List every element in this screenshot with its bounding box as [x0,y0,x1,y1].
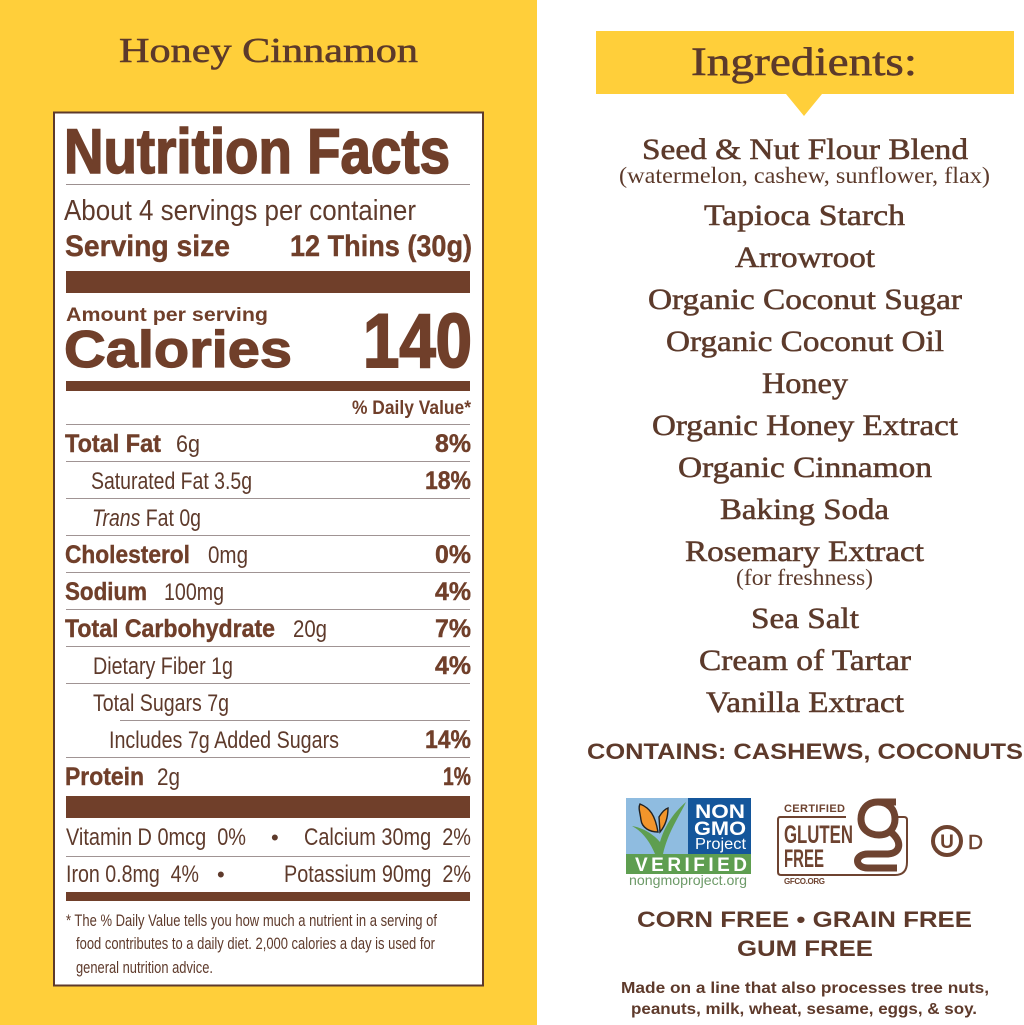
calories block: Calories [64,321,292,379]
nutrient rows: Saturated Fat 3.5g [91,468,252,495]
panel: nutrition facts label [54,112,483,986]
vitamins and minerals [66,796,471,901]
facility allergen note [621,980,989,1018]
ingredients list: Rosemary Extract [685,535,925,568]
icon: non-GMO project verified: GMO [694,819,746,840]
servings block: 12 Thins (30g) [290,230,472,263]
facility allergen note: Made on a line that also processes tree nuts, [621,980,989,997]
footnote: food contributes to a daily diet. 2,000 calories a day is used for [76,934,435,953]
icon: non-GMO project verified [626,798,751,888]
vitamins and minerals: • [271,825,279,850]
ingredients list: Organic Coconut Sugar [648,283,962,316]
daily value header: % Daily Value* [352,398,472,419]
nutrient rows: 20g [293,616,327,643]
nutrient rows [65,424,471,791]
nutrient rows: 2g [157,764,180,791]
nutrient rows: Sodium [65,578,147,606]
nutrient rows: 14% [425,726,471,754]
nutrient rows: Total Carbohydrate [65,615,275,643]
ingredients list: Cream of Tartar [699,644,911,677]
icon: OU-D kosher: U [940,832,954,853]
heading: nutrition facts: Nutrition Facts [64,117,450,187]
ingredients list: Vanilla Extract [706,686,905,719]
icon: OU-D kosher: D [968,832,983,854]
vitamins and minerals: Iron 0.8mg 4% [66,861,199,888]
nutrient rows: 8% [435,430,471,458]
ingredients list: (watermelon, cashew, sunflower, flax) [619,163,990,188]
nutrient rows: Protein [65,763,144,791]
vitamins and minerals: Vitamin D 0mcg 0% [66,824,246,851]
ingredients list: Seed & Nut Flour Blend [642,133,968,166]
calories block: Amount per serving [66,305,268,326]
ingredients list [619,133,990,719]
footnote: general nutrition advice. [76,958,213,977]
vitamins and minerals: • [217,862,225,887]
ingredients list: Organic Coconut Oil [666,325,944,358]
ingredients list: Baking Soda [720,493,889,526]
calories block [64,299,472,391]
icon: certified gluten free [778,802,907,886]
nutrient rows: 0% [435,541,471,569]
free-from claims: GUM FREE [737,936,873,961]
free-from claims [637,907,972,961]
vitamins and minerals: Potassium 90mg 2% [284,861,471,888]
ingredients list: Sea Salt [751,602,860,635]
icon: non-GMO project verified: nongmoproject.org [629,872,747,888]
nutrient rows: 7% [435,615,471,643]
title: flavour name: Honey Cinnamon [119,31,418,70]
nutrient rows: Includes 7g Added Sugars [109,727,339,754]
icon: certified gluten free: CERTIFIED [784,803,845,815]
nutrient rows: 6g [176,431,200,458]
ingredients list: Organic Honey Extract [652,409,959,442]
nutrient rows: Cholesterol [65,541,190,569]
footnote: * The % Daily Value tells you how much a nutrient in a serving of [66,911,437,930]
banner: ingredients heading [596,31,1014,116]
icon: OU-D kosher [933,827,983,855]
ingredients list: Tapioca Starch [704,199,905,232]
icon: non-GMO project verified: NON [695,802,745,823]
ingredients list: Arrowroot [735,241,876,274]
ingredients list: Organic Cinnamon [678,451,932,484]
servings block: Serving size [65,230,230,263]
icon: certified gluten free: FREE [784,845,824,873]
vitamins and minerals: Calcium 30mg 2% [304,824,471,851]
servings block: About 4 servings per container [64,195,416,227]
icon: certified gluten free: GFCO.ORG [784,877,825,886]
nutrient rows: 1% [443,763,471,791]
nutrient rows: Dietary Fiber 1g [93,653,233,680]
ingredients list: (for freshness) [736,565,873,590]
nutrient rows: Total Sugars 7g [93,690,229,717]
nutrient rows: 100mg [164,579,224,606]
allergen statement: CONTAINS: CASHEWS, COCONUTS [587,739,1023,764]
nutrient rows: 4% [435,652,471,680]
facility allergen note: peanuts, milk, wheat, sesame, eggs, & soy. [631,1001,977,1018]
icon: certified gluten free: GLUTEN [784,821,853,849]
nutrient rows: 18% [425,467,471,495]
footnote [66,911,437,977]
ingredients list: Honey [762,367,848,400]
icon: non-GMO project verified: Project [695,836,747,853]
nutrient rows: 0mg [208,542,248,569]
servings block [64,184,472,293]
calories block: 140 [363,299,472,384]
nutrient rows: Total Fat [65,430,162,458]
free-from claims: CORN FREE • GRAIN FREE [637,907,972,932]
nutrient rows: 4% [435,578,471,606]
banner: ingredients heading: Ingredients: [691,39,917,84]
nutrient rows: Trans Fat 0g [92,505,201,532]
panel: left yellow background [0,0,537,1025]
icon: non-GMO project verified: VERIFIED [635,855,747,876]
